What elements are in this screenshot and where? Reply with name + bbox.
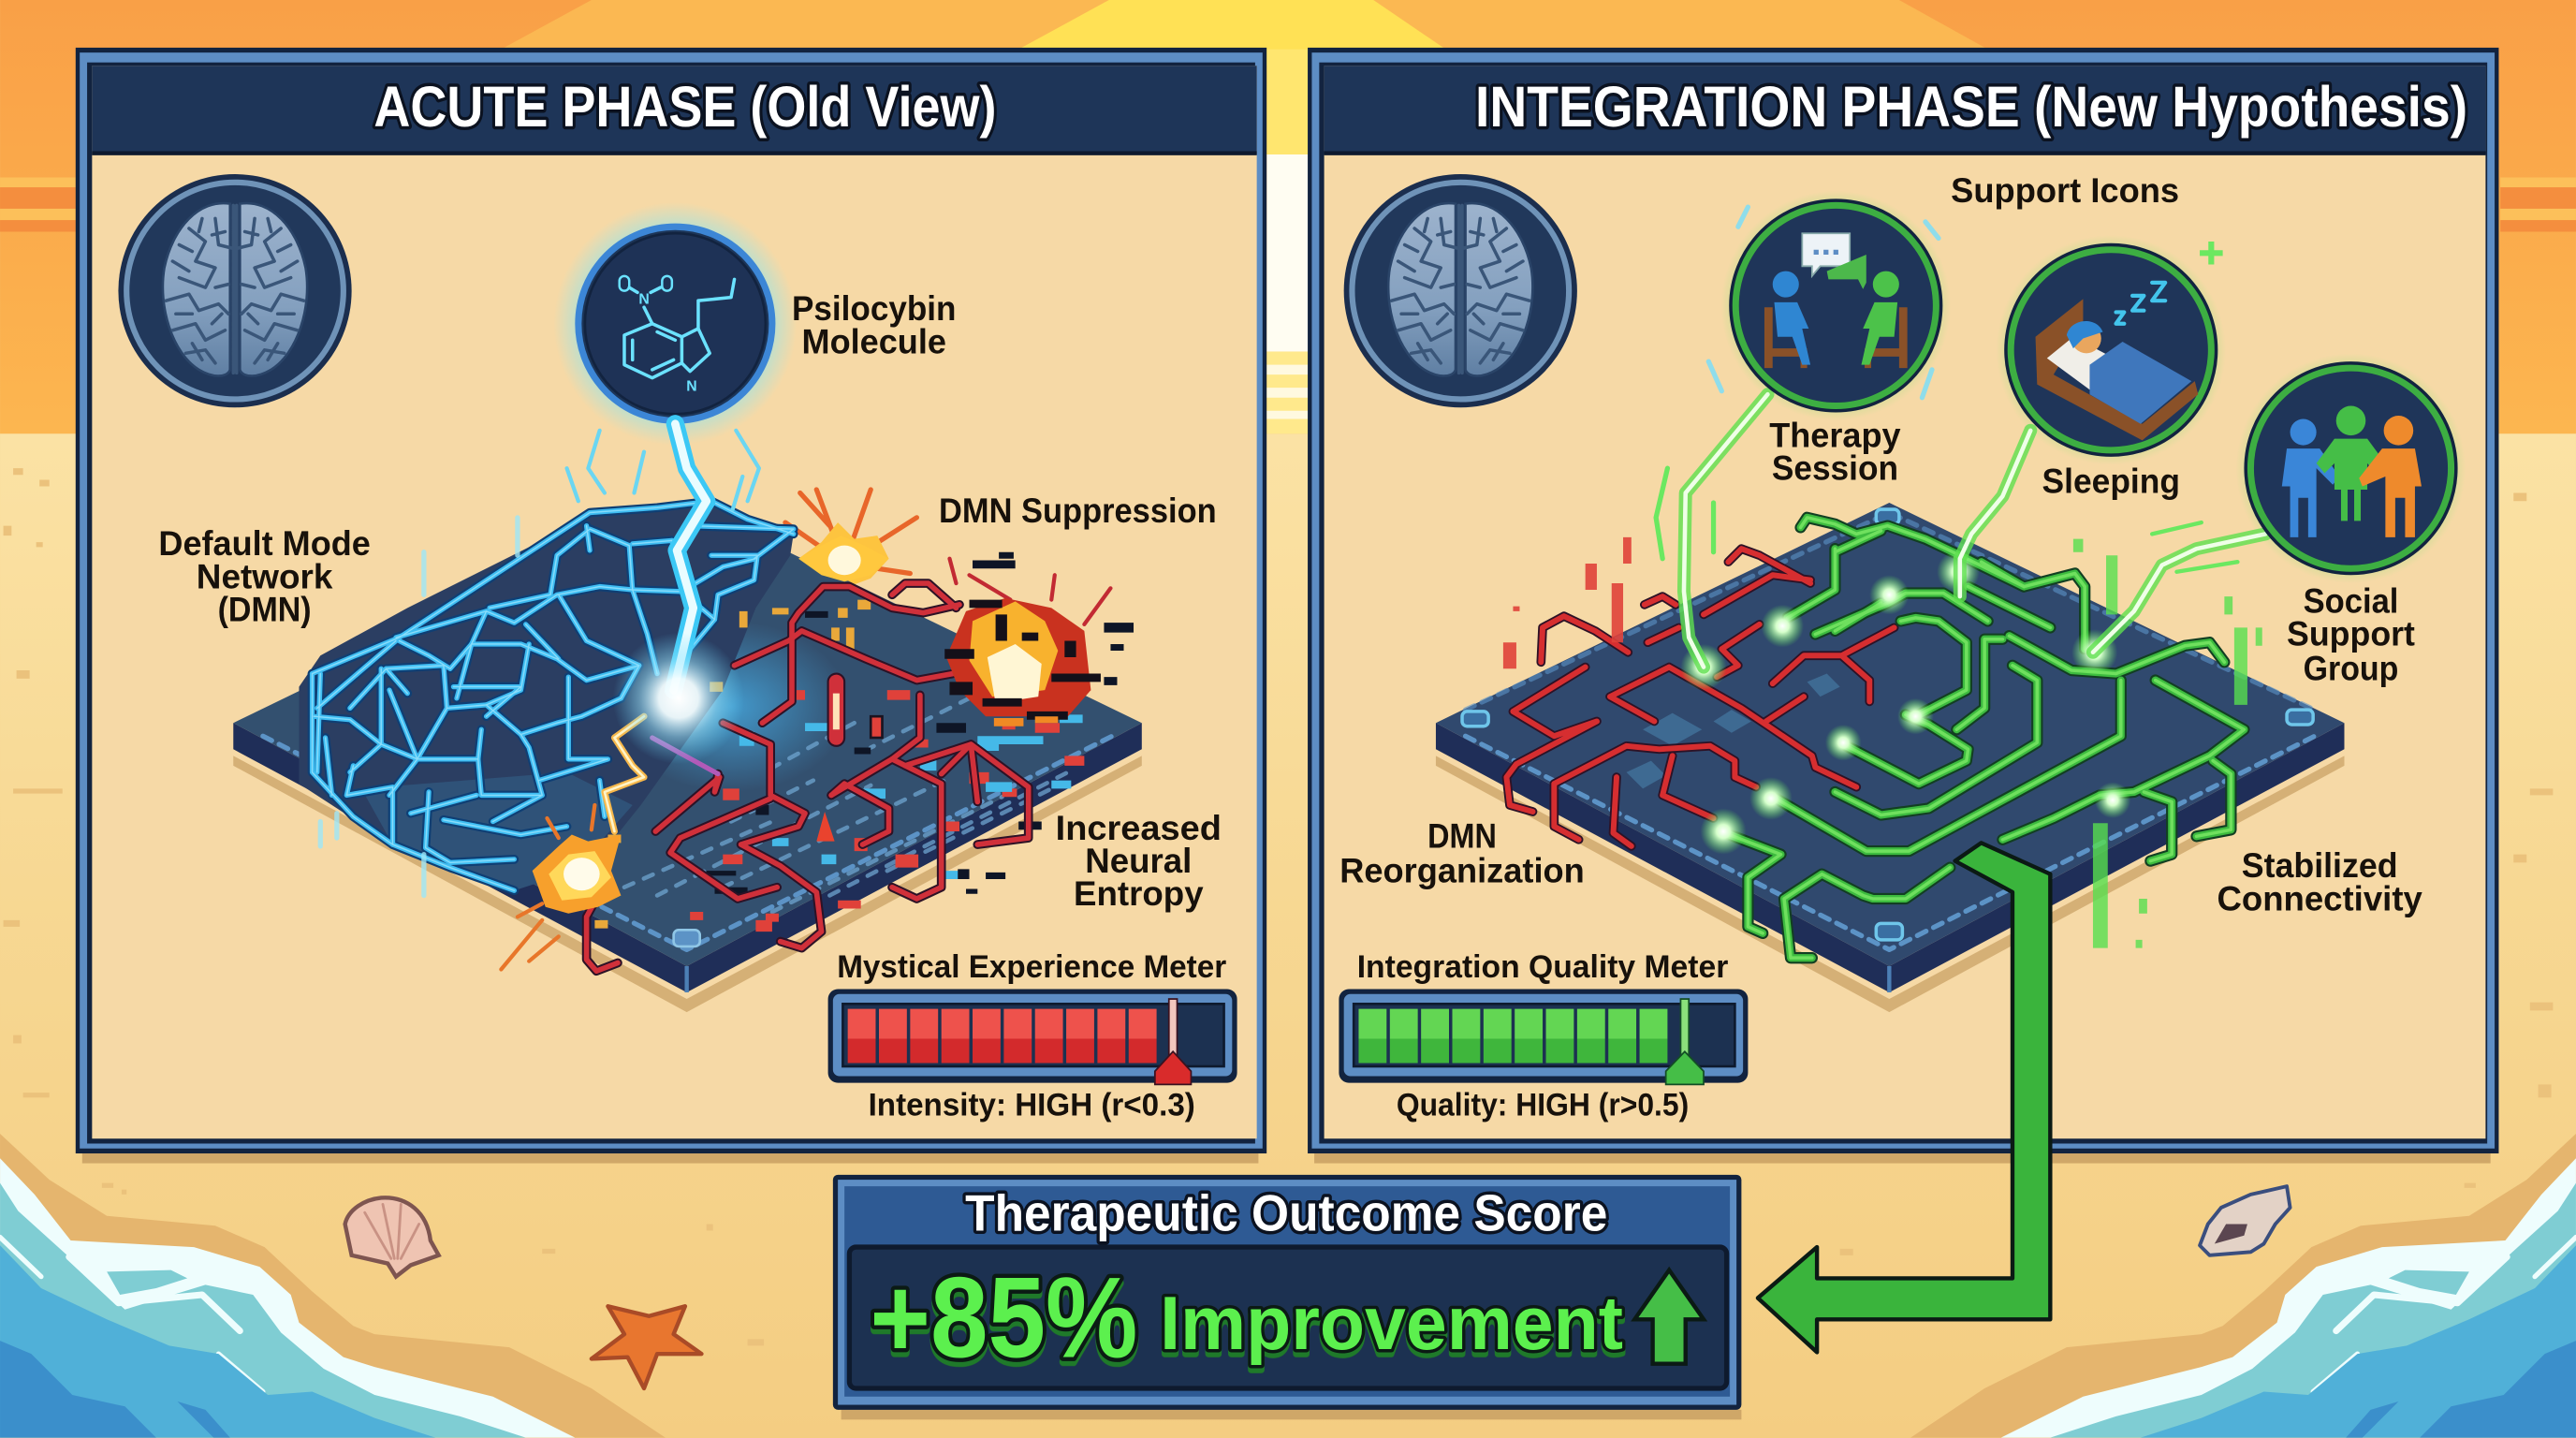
panel: acute phase: [76, 48, 1266, 1164]
meter needle: [1666, 999, 1704, 1084]
label: DMN suppression: DMN Suppression: [939, 492, 1217, 530]
dome backing: [299, 501, 794, 890]
label: default mode network: Default Mode: [158, 524, 371, 563]
title: ACUTE PHASE (Old View): [373, 75, 996, 139]
board pixel bands: [624, 698, 1068, 912]
title: INTEGRATION PHASE (New Hypothesis): [1475, 75, 2467, 139]
icon: psilocybin molecule: [554, 202, 797, 446]
label: integration quality meter: Integration Quality Meter: [1357, 949, 1728, 985]
label: therapy session: Therapy: [1769, 416, 1901, 454]
label: social support group: Group: [2304, 650, 2398, 688]
label: psilocybin molecule: Psilocybin: [792, 289, 956, 328]
blue person: [2282, 419, 2339, 537]
red tangled tubes: [587, 583, 1029, 971]
icon: brain: [118, 174, 352, 407]
red residual tubes: [1506, 549, 1895, 846]
label: stabilized connectivity: [2217, 846, 2422, 917]
label: support icons: Support Icons: [1951, 171, 2179, 210]
board blue-lit area: [613, 621, 849, 792]
label: mystical experience meter: Mystical Experience Meter: [837, 949, 1226, 985]
header bar: [92, 66, 1257, 154]
blue neural mesh: [313, 501, 794, 890]
improvement word: Improvement: [1160, 1282, 1623, 1366]
green drips: [2073, 539, 2262, 948]
zzz: [2116, 283, 2165, 324]
label: stabilized connectivity: Stabilized: [2242, 846, 2398, 885]
board noise pixels: [690, 690, 1084, 932]
label: default mode network: Network: [197, 557, 333, 595]
icon: conch shell: [2200, 1186, 2291, 1255]
isometric board: chaotic network: [233, 424, 1142, 1012]
icon: starfish: [592, 1306, 701, 1388]
icon: psilocybin molecule: N: [686, 379, 697, 395]
green figure in chair: [1862, 271, 1908, 368]
lower dome sheen: [361, 772, 633, 890]
icon: psilocybin molecule: N: [638, 292, 650, 308]
explosion: upper core: [798, 536, 889, 581]
beam: social support to board: [2093, 522, 2265, 653]
icon: up arrow: [1634, 1270, 1704, 1364]
orange person: [2359, 416, 2422, 537]
icon: therapy session: [1708, 191, 1951, 420]
label: default mode network: [158, 524, 371, 628]
panel: integration phase: [1308, 48, 2498, 1164]
wisps: [1708, 207, 1939, 398]
worn diamond patches: [1627, 674, 1840, 788]
label: intensity value: Intensity: HIGH (r<0.3): [869, 1088, 1195, 1123]
label: DMN reorganization: DMN: [1427, 817, 1497, 856]
label: social support group: Social: [2304, 582, 2398, 621]
panel: therapeutic outcome score: [833, 1175, 1741, 1419]
explosion rays behind board: [785, 490, 916, 588]
red debris pixels: [1503, 537, 1632, 668]
beam: sleeping to board: [1960, 431, 2030, 596]
label: increased neural entropy: Increased: [1056, 809, 1222, 847]
meter segments: [1358, 1009, 1667, 1064]
red capsules: [816, 674, 883, 842]
label: quality value: Quality: HIGH (r>0.5): [1397, 1088, 1689, 1123]
score value: +85%: [870, 1255, 1137, 1383]
water: right shore: [1910, 1134, 2576, 1438]
label: psilocybin molecule: Molecule: [802, 322, 946, 360]
icon: brain: [1344, 174, 1577, 407]
label: sleeping: Sleeping: [2042, 462, 2180, 501]
speech bubbles: [1802, 233, 1850, 276]
lightning strike from molecule: [320, 424, 759, 895]
green person: [2317, 405, 2385, 521]
label: social support group: Support: [2287, 615, 2415, 653]
green stabilized tubes: [1725, 518, 2244, 958]
label: DMN reorganization: [1339, 817, 1585, 889]
header bar: [1325, 66, 2485, 154]
meter segments: [848, 1009, 1157, 1064]
score title: Therapeutic Outcome Score: [965, 1185, 1607, 1242]
explosion: lower: [501, 805, 621, 969]
label: social support group: [2287, 582, 2415, 688]
icon: sleeping: [1996, 235, 2226, 465]
label: default mode network: (DMN): [218, 590, 312, 628]
green spark nodes: [1680, 550, 2130, 855]
label: stabilized connectivity: Connectivity: [2217, 879, 2422, 917]
blue figure in chair: [1764, 271, 1810, 368]
meter needle: [1155, 999, 1191, 1084]
integration quality meter: [1339, 990, 1748, 1084]
isometric board: reorganized network: [1436, 503, 2344, 1012]
label: DMN reorganization: Reorganization: [1339, 851, 1585, 889]
central flash: [613, 633, 744, 764]
water: left shore: [0, 1134, 666, 1438]
score readout: [849, 1247, 1727, 1388]
label: psilocybin molecule: [792, 289, 956, 360]
flying glitch pixels: [958, 552, 1134, 894]
label: increased neural entropy: [1056, 809, 1222, 913]
explosion: right: [944, 559, 1110, 726]
icon: plus sparkle: [2200, 242, 2223, 265]
icon: social support group: [2236, 353, 2466, 583]
sky: [0, 0, 2576, 433]
beam: therapy to board: [1656, 394, 1767, 668]
label: increased neural entropy: Neural: [1085, 842, 1192, 880]
label: therapy session: [1769, 416, 1901, 487]
mystical experience meter: [828, 990, 1237, 1084]
sand specks: [4, 468, 2553, 1354]
arrow: integration to outcome: [1758, 843, 2050, 1352]
sand: [0, 433, 2576, 1438]
bed: [2036, 299, 2198, 440]
label: increased neural entropy: Entropy: [1074, 874, 1204, 913]
icon: scallop shell: [345, 1197, 439, 1277]
label: therapy session: Session: [1772, 448, 1898, 487]
